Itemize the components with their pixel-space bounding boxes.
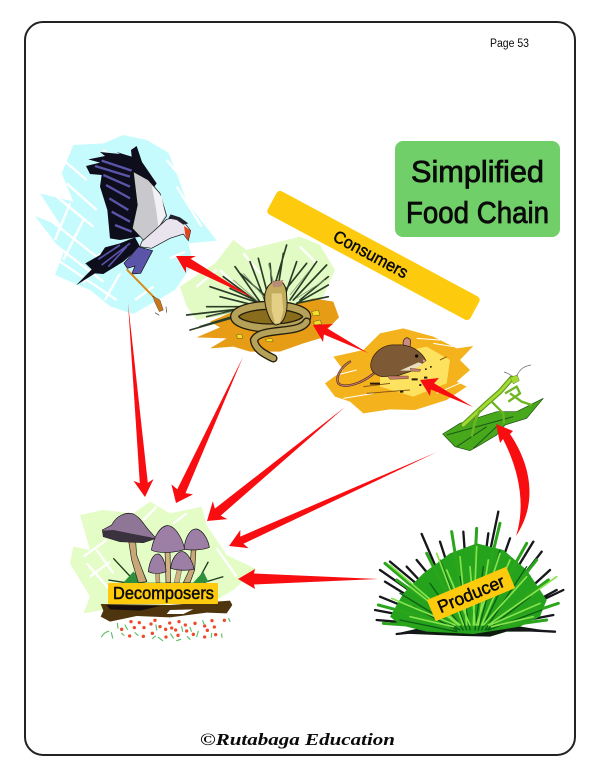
yellow pebbles xyxy=(237,310,322,342)
snake hood xyxy=(265,281,287,325)
arrow: grass to mantis (curved) xyxy=(496,424,529,536)
blue splash background xyxy=(35,135,217,314)
illustration: mouse on straw xyxy=(325,328,473,413)
green blob xyxy=(390,543,547,634)
label: producer: Producer xyxy=(434,571,508,617)
snake coil xyxy=(235,305,307,358)
mouse tail xyxy=(337,362,374,386)
small right mushroom xyxy=(174,568,182,583)
log soil xyxy=(101,601,232,622)
tail feathers xyxy=(76,237,140,285)
leg and foot xyxy=(127,269,155,298)
mantis head and antennae xyxy=(510,375,519,384)
dark wing xyxy=(86,146,157,240)
label: producer xyxy=(427,567,515,621)
grey wing xyxy=(132,172,167,240)
centre tall mushroom xyxy=(165,550,171,583)
ear and eye xyxy=(403,338,411,347)
illustration: grass producer xyxy=(375,512,563,637)
black back blades xyxy=(375,512,563,634)
red seeds and green sprouts xyxy=(120,619,226,639)
dark green streaks xyxy=(400,550,542,632)
body and head xyxy=(140,217,191,248)
arrow: mantis to mouse xyxy=(420,378,473,407)
green splash background xyxy=(180,237,335,320)
arrow: bird to decomposers xyxy=(128,303,154,497)
title line 2: Food Chain xyxy=(406,195,549,230)
mantis legs xyxy=(472,387,532,437)
bright green blades xyxy=(390,547,557,627)
arrow: mouse to snake xyxy=(313,324,368,353)
page number: Page 53 xyxy=(490,38,529,50)
mantis body xyxy=(463,378,512,425)
arrow: mouse to decomposers xyxy=(207,407,345,521)
illustration: secretary bird xyxy=(35,135,217,315)
mid green blades xyxy=(378,523,558,628)
panel: title xyxy=(395,141,560,237)
rear right mushroom xyxy=(183,548,196,583)
label: consumers banner: Consumers xyxy=(330,227,411,282)
purple thighs xyxy=(124,247,153,274)
shadow base xyxy=(397,625,553,637)
title line 1: Simplified xyxy=(411,154,544,189)
grass tuft xyxy=(187,245,328,330)
feet xyxy=(387,368,421,379)
label: consumers banner xyxy=(266,190,481,321)
arrow: snake to decomposers xyxy=(171,357,243,503)
label: decomposers: Decomposers xyxy=(113,583,214,603)
small left mushroom xyxy=(155,572,160,583)
illustration: cobra in grass xyxy=(180,237,339,358)
arrow: grass to decomposers xyxy=(238,569,378,589)
crumbs xyxy=(370,366,432,393)
grass xyxy=(108,558,223,583)
mouse body xyxy=(371,345,426,377)
big mushroom cap xyxy=(102,513,156,543)
arrow: mantis to decomposers xyxy=(229,452,437,548)
footer copyright: ©Rutabaga Education xyxy=(200,730,395,749)
big mushroom stem xyxy=(127,533,147,583)
straw splash xyxy=(325,328,473,413)
illustration: mushrooms xyxy=(70,502,257,641)
orange ground xyxy=(197,298,339,352)
green splash background xyxy=(70,502,257,613)
illustration: praying mantis on leaf xyxy=(443,365,543,451)
leaf xyxy=(443,398,543,451)
arrow: snake to bird xyxy=(176,256,253,298)
